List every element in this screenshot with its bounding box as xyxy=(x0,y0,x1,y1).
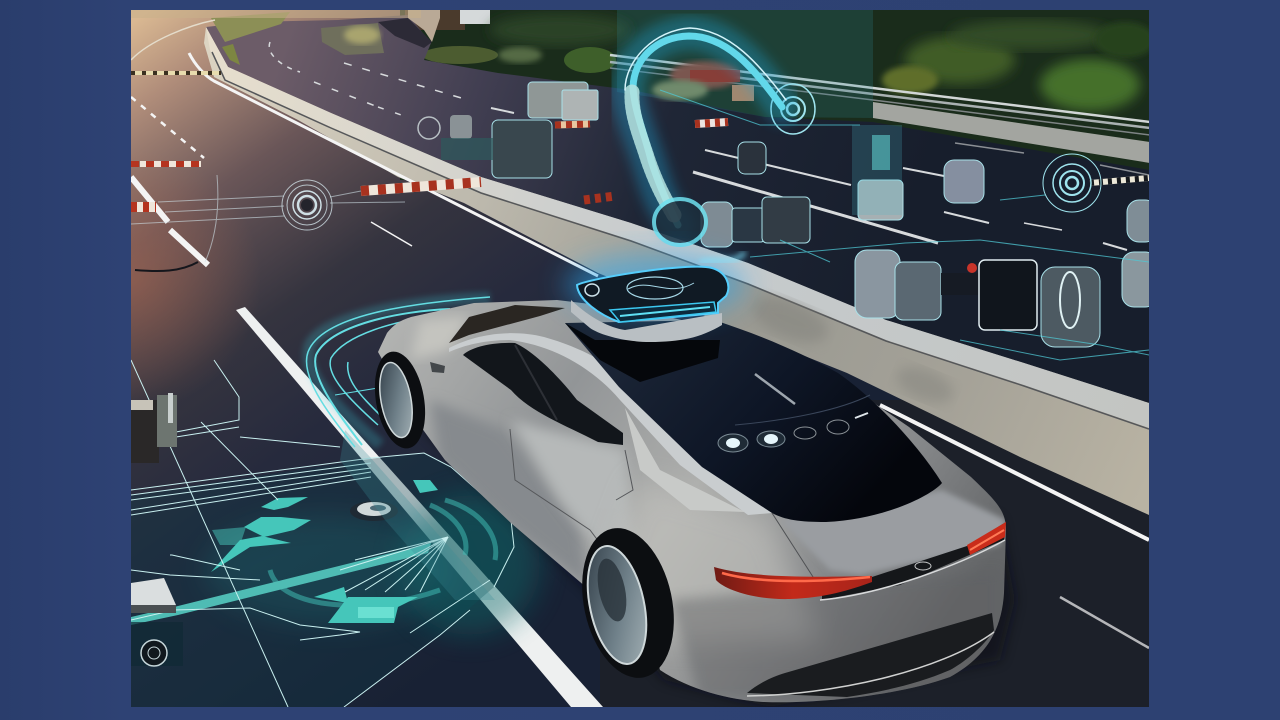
body shading xyxy=(410,315,1006,700)
concrete median barrier xyxy=(204,27,1149,515)
roof reflection under lidar xyxy=(565,323,720,382)
far carriageway xyxy=(206,15,1149,330)
road markings xyxy=(131,20,1149,648)
trim line xyxy=(820,540,1005,600)
side window xyxy=(463,343,623,445)
door lines xyxy=(510,429,597,539)
warning barricades xyxy=(131,73,1149,207)
dark windscreen strip xyxy=(449,305,565,343)
holographic sensor ring left xyxy=(131,175,405,262)
car body xyxy=(378,300,1006,702)
rear wheel xyxy=(569,520,687,686)
mini car icon xyxy=(350,501,398,521)
far wall and guard rail xyxy=(610,55,1150,163)
tail light left xyxy=(714,567,872,599)
holographic cyan arch xyxy=(625,28,786,245)
silver sedan xyxy=(368,300,1015,707)
distant roadside and greenery xyxy=(400,10,1155,180)
cyan sweep arcs by front of car xyxy=(306,297,490,447)
rear emblem xyxy=(915,562,931,570)
front wheel xyxy=(368,348,432,452)
side road and island xyxy=(131,10,440,65)
mirror xyxy=(430,362,445,373)
hologram glass panel over trees xyxy=(617,10,873,118)
rear black strip xyxy=(822,522,1006,600)
roof-mounted lidar unit xyxy=(565,252,745,342)
translucent tint on lane line through scan xyxy=(340,430,495,600)
roadside equipment left xyxy=(131,393,177,463)
rear bumper xyxy=(747,613,994,697)
tail light right xyxy=(967,522,1006,555)
roof sensors xyxy=(718,413,868,452)
control box bottom left xyxy=(131,578,176,667)
rear pillar highlight xyxy=(625,408,745,512)
bright roof pillar xyxy=(449,333,772,515)
distant scene inside hologram xyxy=(652,61,754,101)
far road lane markings xyxy=(269,42,1149,250)
main road surface xyxy=(131,10,1149,707)
photo panel xyxy=(131,10,1157,707)
roof highlight xyxy=(755,374,795,404)
glass roof xyxy=(565,320,942,522)
holographic machinery on far road xyxy=(418,82,1157,360)
car shadow xyxy=(420,420,1015,707)
dark cable on road xyxy=(135,262,198,271)
holographic road scan lower left xyxy=(131,360,540,707)
infographic scene xyxy=(131,10,1149,707)
main white lane line xyxy=(236,307,603,707)
